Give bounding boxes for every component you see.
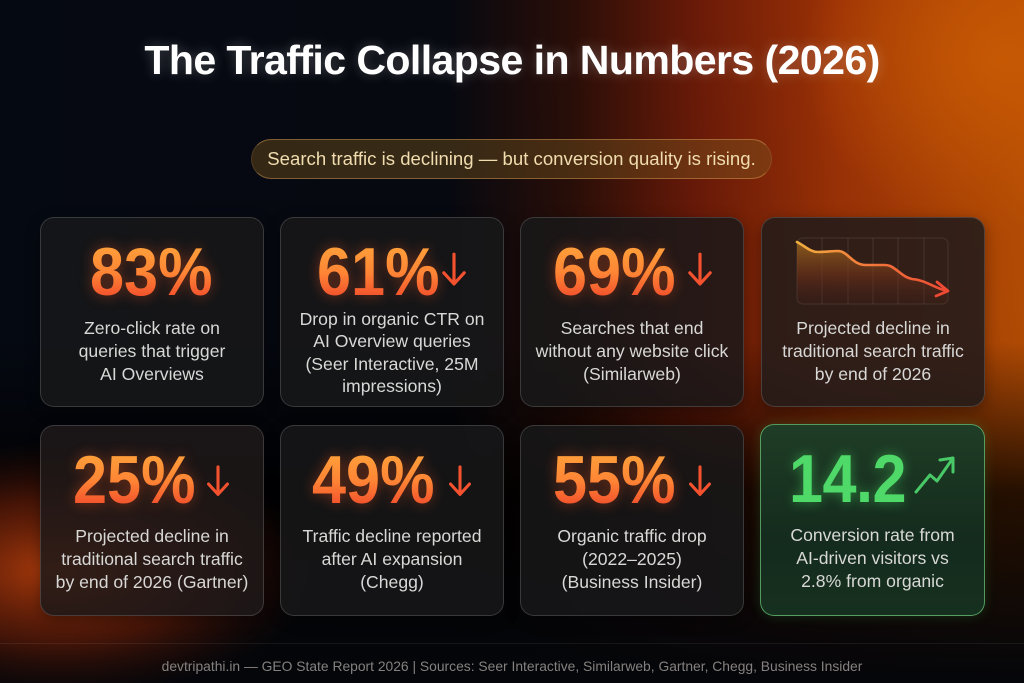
icon: down arrow [442, 252, 466, 286]
card: 25% Gartner [40, 425, 264, 616]
description [79, 318, 226, 384]
card: projected decline chart [761, 217, 985, 407]
icon: trending up arrow [914, 456, 954, 494]
description: Drop in organic CTR on [300, 309, 484, 329]
stat: 55%: 55% [553, 442, 675, 518]
icon: down arrow [688, 252, 712, 286]
description: traditional search traffic [782, 341, 964, 361]
description: Projected decline in [75, 526, 229, 546]
description: without any website click [536, 341, 728, 361]
description: Conversion rate from [790, 525, 955, 545]
description [557, 526, 707, 592]
card: 69% searches without click [520, 217, 744, 407]
footer sources: devtripathi.in — GEO State Report 2026 | Sources: Seer Interactive, Similarweb, Gartner, Chegg, Business Insider [162, 658, 862, 674]
description: after AI expansion [322, 549, 462, 569]
card: 61% organic CTR drop [280, 217, 504, 407]
description [782, 318, 964, 384]
description: AI-driven visitors vs [796, 548, 949, 568]
description: Projected decline in [796, 318, 950, 338]
description: Traffic decline reported [303, 526, 481, 546]
description: impressions) [342, 376, 442, 396]
description: by end of 2026 [815, 364, 931, 384]
line chart: declining traffic [796, 238, 950, 304]
description: AI Overview queries [313, 331, 471, 351]
icon: down arrow [207, 465, 229, 496]
card: 83% zero-click rate [40, 217, 264, 407]
description: (Chegg) [360, 572, 424, 592]
subtitle pill: Search traffic is declining — but conversion quality is rising. [267, 148, 756, 169]
icon: down arrow [689, 465, 711, 496]
stat: 61%: 61% [317, 234, 439, 310]
description: AI Overviews [100, 364, 204, 384]
description [56, 526, 248, 592]
description [536, 318, 728, 384]
description: (Business Insider) [562, 572, 702, 592]
description: (2022–2025) [582, 549, 682, 569]
card: 55% Business Insider [520, 425, 744, 616]
stat: 69%: 69% [553, 234, 675, 310]
subtitle pill [251, 139, 772, 179]
description: Searches that end [561, 318, 703, 338]
description: Zero-click rate on [84, 318, 220, 338]
stat: 49%: 49% [312, 442, 434, 518]
description: Organic traffic drop [557, 526, 707, 546]
description: (Seer Interactive, 25M [305, 354, 479, 374]
card: 14.2 conversion rate [760, 424, 985, 616]
description: traditional search traffic [61, 549, 243, 569]
description: 2.8% from organic [801, 571, 944, 591]
description [302, 526, 481, 592]
description: by end of 2026 (Gartner) [56, 572, 248, 592]
description [790, 525, 955, 591]
stat: 14.2: 14.2 [789, 441, 906, 517]
description: (Similarweb) [583, 364, 681, 384]
stat: 83%: 83% [90, 234, 212, 310]
stat: 25%: 25% [73, 442, 195, 518]
description: queries that trigger [79, 341, 225, 361]
icon: down arrow [449, 465, 471, 496]
card: 49% Chegg [280, 425, 504, 616]
title: The Traffic Collapse in Numbers (2026) [144, 37, 880, 83]
description [300, 309, 484, 396]
